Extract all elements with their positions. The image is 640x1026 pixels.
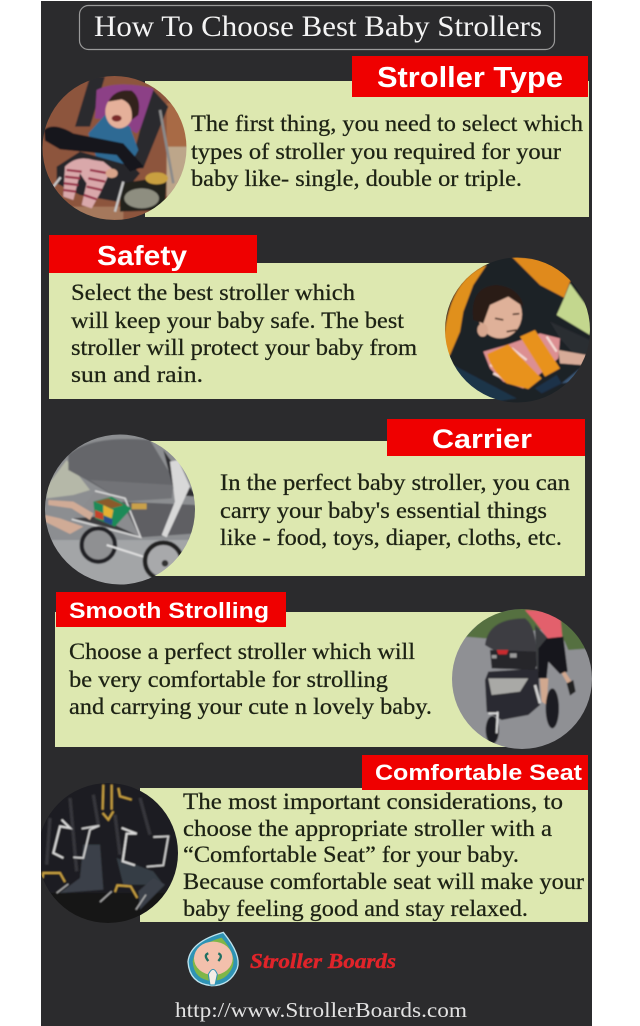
- white page edge: [0, 0, 41, 1026]
- panel background: [55, 612, 525, 747]
- body text: stroller will protect your baby from: [71, 335, 417, 360]
- logo icon: baby face in leaf drop: [188, 932, 238, 986]
- body text: [220, 470, 571, 550]
- body text: be very comfortable for strolling: [69, 667, 389, 692]
- body text: types of stroller you required for your: [191, 139, 561, 164]
- panel: smooth strolling: [55, 592, 595, 755]
- body text: [191, 111, 584, 191]
- heading: Comfortable Seat: [375, 760, 583, 785]
- panel background: [49, 263, 519, 399]
- body text: “Comfortable Seat” for your baby.: [183, 842, 519, 867]
- body text: like - food, toys, diaper, cloths, etc.: [220, 525, 562, 550]
- body text: sun and rain.: [71, 362, 203, 387]
- red heading bar: [362, 755, 588, 790]
- heading: Stroller Type: [377, 62, 563, 94]
- photo: triple stroller seats: [41, 783, 178, 923]
- website url: http://www.StrollerBoards.com: [175, 998, 467, 1022]
- red heading bar: [56, 592, 286, 627]
- body text: Choose a perfect stroller which will: [69, 639, 415, 664]
- body text: The first thing, you need to select which: [191, 111, 584, 136]
- panel: comfortable seat: [40, 755, 588, 928]
- body text: baby feeling good and stay relaxed.: [183, 896, 528, 921]
- body text: In the perfect baby stroller, you can: [220, 470, 571, 495]
- panel background: [140, 788, 588, 922]
- panel: carrier: [40, 419, 585, 590]
- heading: Safety: [97, 240, 187, 271]
- heading: Smooth Strolling: [69, 598, 269, 623]
- title: [80, 6, 554, 50]
- panel background: [145, 81, 589, 217]
- panel: stroller type: [40, 56, 589, 225]
- body text: [183, 789, 584, 921]
- title: How To Choose Best Baby Strollers: [94, 10, 542, 43]
- logo text: Stroller Boards: [250, 949, 396, 973]
- red heading bar: [387, 419, 585, 456]
- body text: carry your baby's essential things: [220, 498, 547, 523]
- body text: and carrying your cute n lovely baby.: [69, 694, 432, 719]
- red heading bar: [352, 56, 588, 97]
- body text: baby like- single, double or triple.: [191, 166, 522, 191]
- photo: baby with orange straps: [440, 255, 595, 405]
- red heading bar: [49, 235, 257, 273]
- body text: Select the best stroller which: [71, 280, 356, 305]
- photo: laughing baby in stroller: [42, 76, 186, 220]
- panel background: [145, 441, 585, 576]
- photo: jogging stroller: [452, 609, 592, 749]
- photo: stroller storage basket: [45, 434, 195, 584]
- panel: safety: [49, 235, 595, 405]
- body text: Because comfortable seat will make your: [183, 869, 584, 894]
- body text: [71, 280, 417, 387]
- heading: Carrier: [432, 424, 533, 454]
- body text: choose the appropriate stroller with a: [183, 816, 552, 841]
- body text: will keep your baby safe. The best: [71, 308, 405, 333]
- body text: The most important considerations, to: [183, 789, 563, 814]
- body text: [69, 639, 432, 719]
